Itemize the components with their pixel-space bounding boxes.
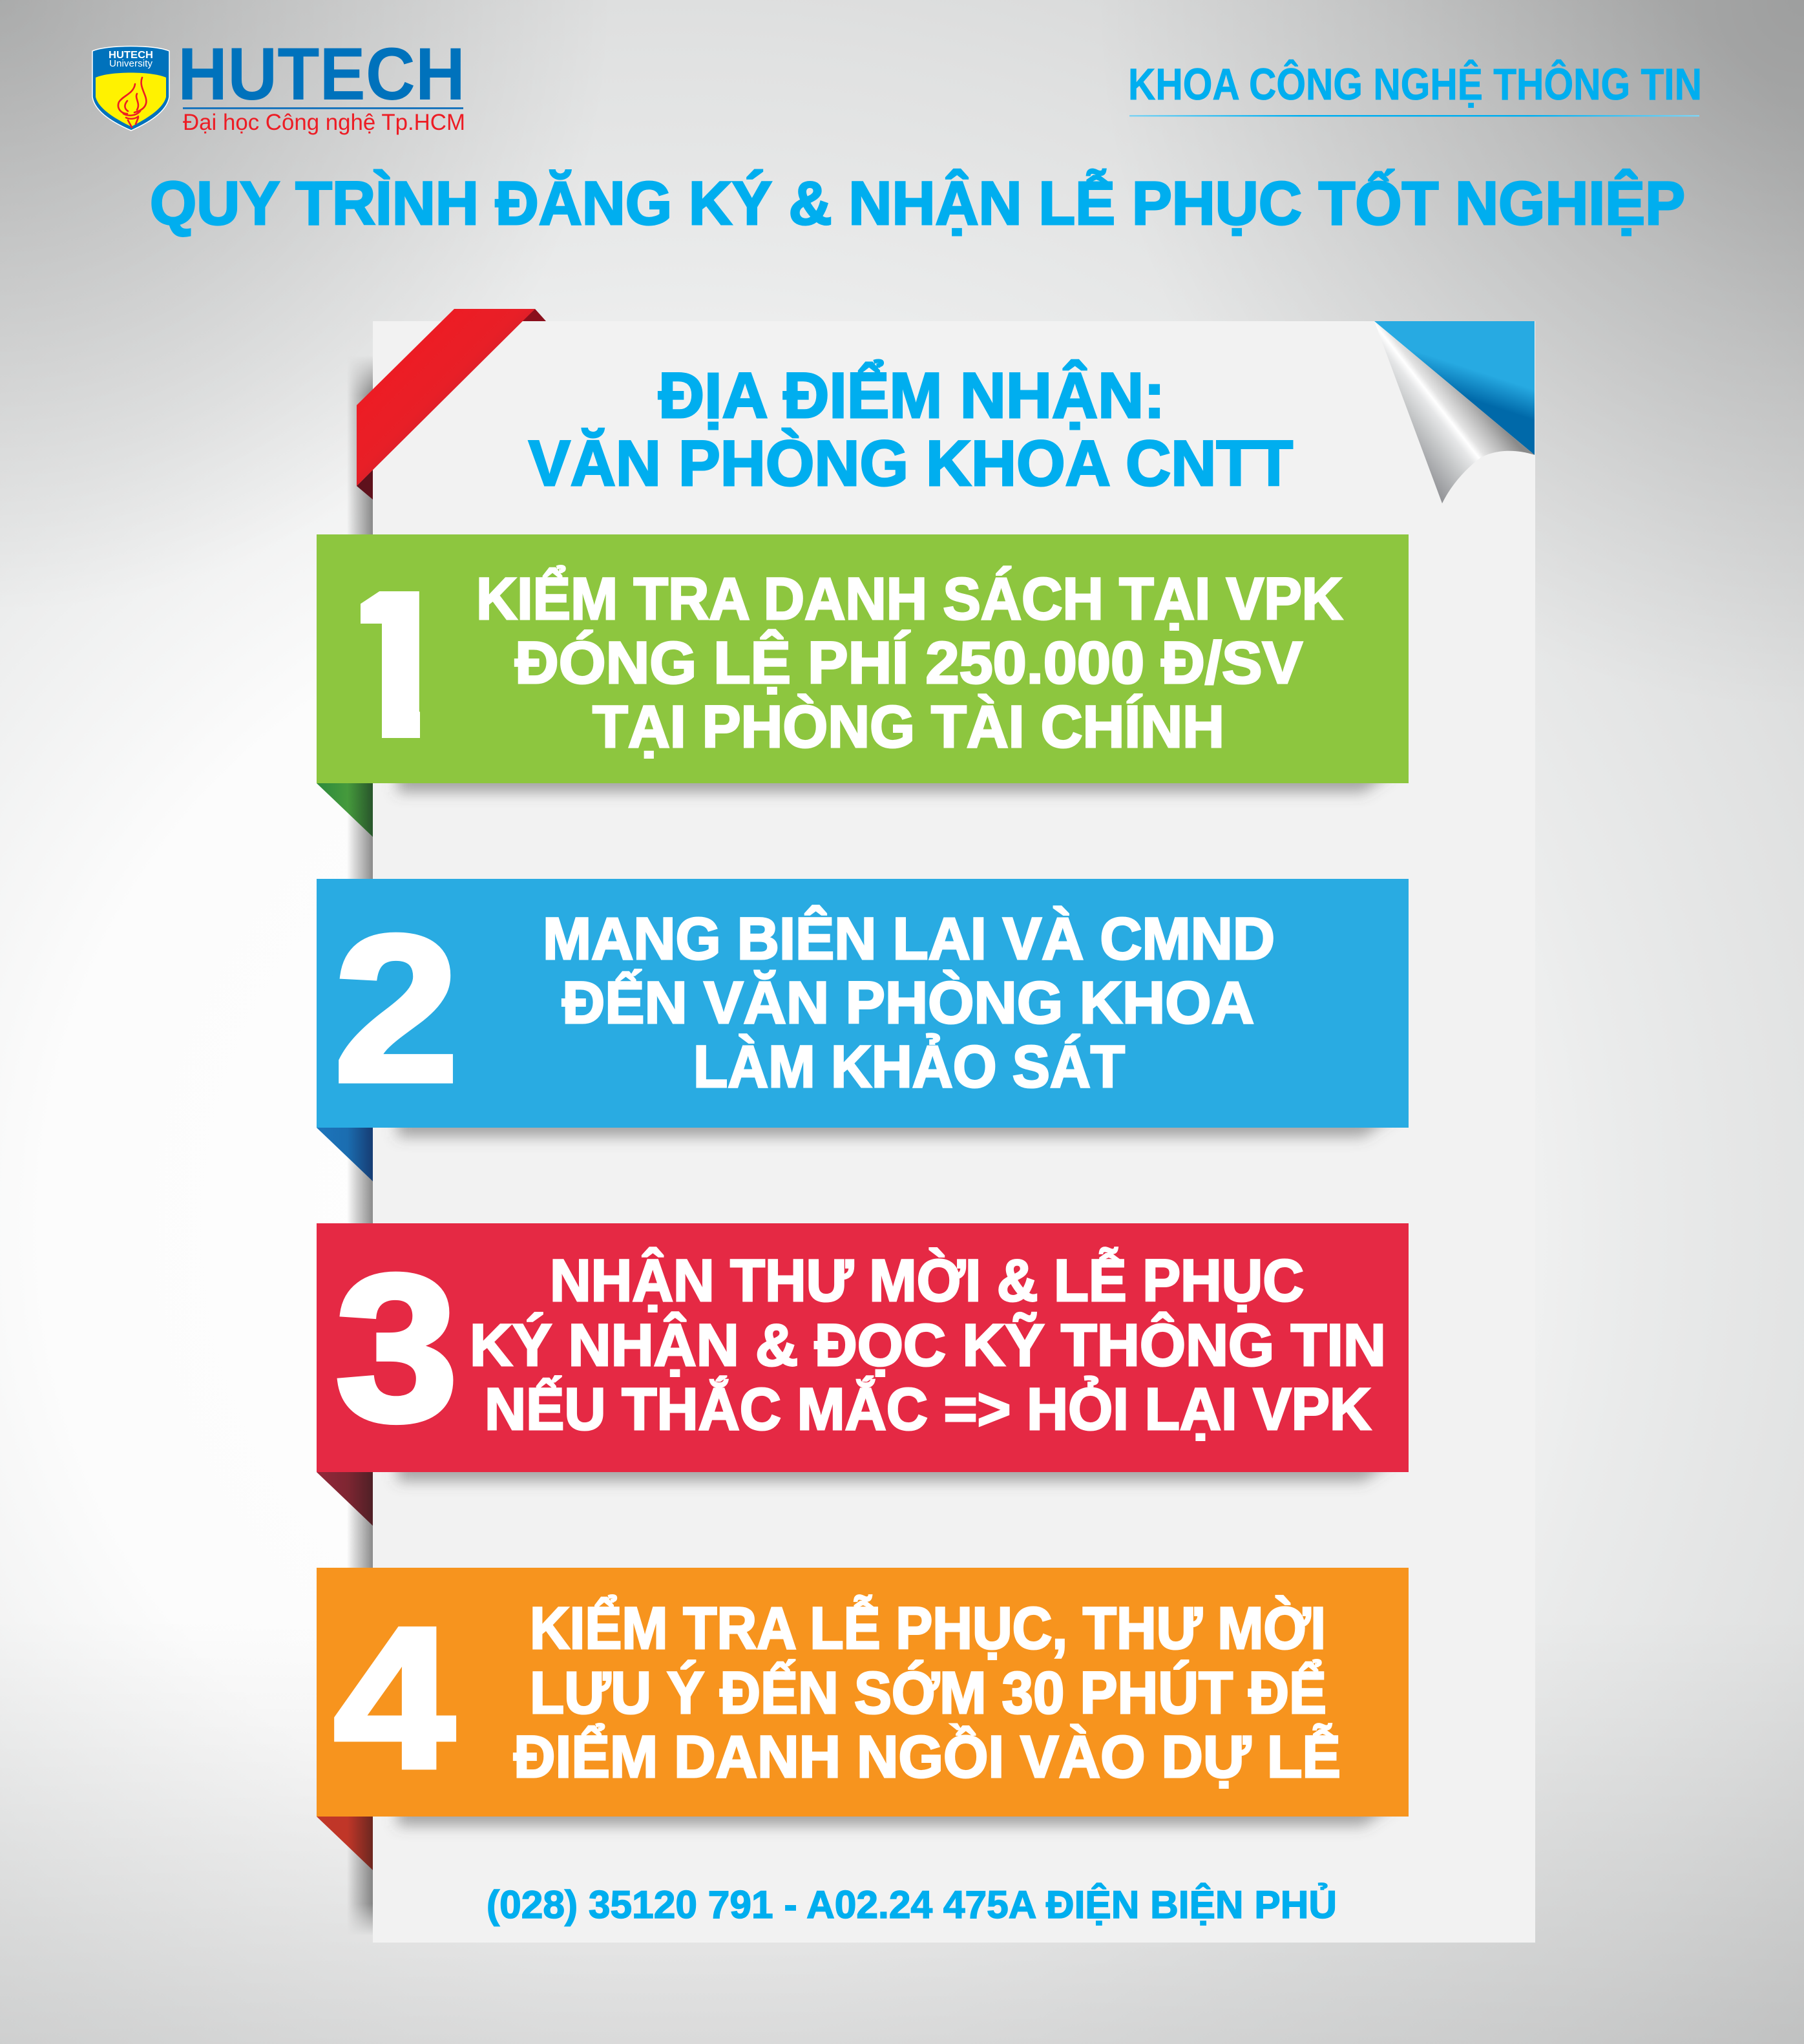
step 4 panel: [317, 1568, 1409, 1870]
fold: crimson: [317, 1472, 373, 1526]
step 2 text: [543, 905, 1275, 1100]
paper sheet: [373, 321, 1535, 1943]
header logo: HUTECH: [92, 33, 465, 135]
number 1: 1: [337, 545, 454, 783]
step 4 text: ĐIỂM DANH NGỒI VÀO DỰ LỄ: [514, 1723, 1341, 1790]
location heading: ĐỊA ĐIỂM NHẬN:: [658, 359, 1165, 431]
step 1 text: TẠI PHÒNG TÀI CHÍNH: [593, 693, 1224, 760]
step 3 text: KÝ NHẬN & ĐỌC KỸ THÔNG TIN: [470, 1312, 1386, 1378]
logo tagline: Đại học Công nghệ Tp.HCM: [183, 110, 465, 135]
step 2 text: ĐẾN VĂN PHÒNG KHOA: [562, 969, 1254, 1036]
step 2 panel: [317, 879, 1409, 1181]
fold: orange: [317, 1817, 373, 1870]
step 4 text: KIỂM TRA LỄ PHỤC, THƯ MỜI: [530, 1594, 1326, 1661]
fold: blue: [317, 1128, 373, 1181]
icon: HUTECH shield with torch: HUTECH: [109, 50, 153, 61]
step 2 text: MANG BIÊN LAI VÀ CMND: [543, 905, 1275, 972]
icon: HUTECH shield with torch: University: [109, 58, 152, 69]
band: crimson: [317, 1223, 1409, 1472]
step 3 panel: [317, 1223, 1409, 1526]
step 2 text: LÀM KHẢO SÁT: [693, 1033, 1125, 1100]
icon: HUTECH shield with torch: [92, 47, 169, 131]
step 3 text: [470, 1247, 1386, 1442]
band: orange: [317, 1568, 1409, 1817]
logo wordmark: HUTECH: [178, 33, 465, 116]
band: blue: [317, 879, 1409, 1128]
page curl corner: [1374, 321, 1535, 503]
step 4 text: [514, 1594, 1341, 1790]
step 3 text: NẾU THẮC MẮC => HỎI LẠI VPK: [485, 1376, 1371, 1442]
step 1 panel: [317, 534, 1409, 837]
location heading: VĂN PHÒNG KHOA CNTT: [529, 427, 1293, 499]
band shadows: [397, 767, 1399, 1826]
paper left shadow: [347, 355, 373, 1935]
location heading: [529, 359, 1293, 499]
faculty name: KHOA CÔNG NGHỆ THÔNG TIN: [1128, 59, 1702, 109]
step 1 text: ĐÓNG LỆ PHÍ 250.000 Đ/SV: [515, 629, 1303, 696]
number 4: 4: [334, 1586, 456, 1809]
corner ribbon: [357, 309, 546, 500]
contact footer: (028) 35120 791 - A02.24 475A ĐIỆN BIỆN PHỦ: [487, 1883, 1337, 1926]
number 2: 2: [334, 893, 459, 1125]
step 3 text: NHẬN THƯ MỜI & LỄ PHỤC: [550, 1247, 1304, 1314]
title: QUY TRÌNH ĐĂNG KÝ & NHẬN LỄ PHỤC TỐT NGHIỆP: [150, 169, 1685, 238]
logo rule: [183, 107, 463, 109]
step 4 text: LƯU Ý ĐẾN SỚM 30 PHÚT ĐỂ: [530, 1659, 1327, 1726]
step 1 text: KIỂM TRA DANH SÁCH TẠI VPK: [476, 565, 1343, 632]
step 1 text: [476, 565, 1343, 760]
fold: green: [317, 783, 373, 837]
band: green: [317, 534, 1409, 783]
number 3: 3: [335, 1232, 458, 1464]
